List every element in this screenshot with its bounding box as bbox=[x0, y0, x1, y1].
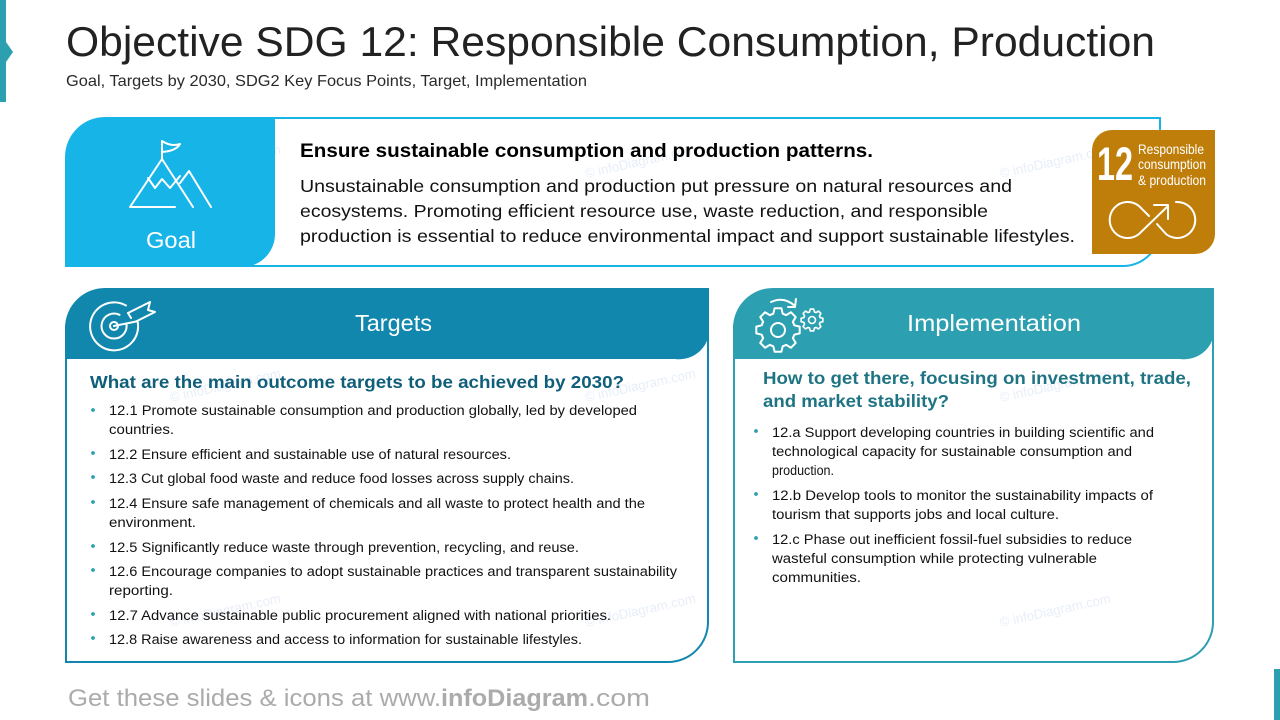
footer promo text: .com bbox=[588, 685, 650, 712]
watermarks: © infoDiagram.com bbox=[998, 142, 1112, 181]
goal label block bbox=[65, 117, 275, 267]
targets list: environment. bbox=[109, 515, 196, 530]
implementation list: 12.b Develop tools to monitor the sustainability impacts of bbox=[772, 488, 1153, 503]
implementation list: production. bbox=[772, 463, 834, 478]
icon: SDG 12 badge: consumption bbox=[1138, 156, 1206, 172]
watermarks: © infoDiagram.com bbox=[583, 366, 697, 405]
implementation heading: Implementation bbox=[907, 310, 1081, 336]
icon: SDG 12 badge: Responsible bbox=[1138, 141, 1204, 157]
footer promo text: infoDiagram bbox=[441, 685, 588, 712]
targets list: 12.2 Ensure efficient and sustainable use of natural resources. bbox=[109, 447, 511, 462]
title: Objective SDG 12: Responsible Consumption, Production bbox=[66, 18, 1155, 65]
targets list bbox=[91, 403, 677, 647]
implementation question: and market stability? bbox=[763, 391, 949, 411]
targets list: 12.7 Advance sustainable public procurement aligned with national priorities. bbox=[109, 608, 611, 623]
targets list: reporting. bbox=[109, 583, 173, 598]
watermarks: © infoDiagram.com bbox=[583, 591, 697, 630]
watermarks: © infoDiagram.com bbox=[998, 366, 1112, 405]
implementation header band bbox=[733, 288, 1214, 359]
corner accent bar bbox=[1274, 669, 1280, 720]
goal panel outline bbox=[105, 118, 1160, 266]
goal description bbox=[300, 176, 1075, 246]
implementation question: How to get there, focusing on investment, trade, bbox=[763, 368, 1191, 388]
implementation list: 12.c Phase out inefficient fossil-fuel subsidies to reduce bbox=[772, 532, 1132, 547]
implementation question bbox=[763, 368, 1191, 411]
watermarks: © infoDiagram.com bbox=[168, 366, 282, 405]
left accent tab bbox=[0, 0, 13, 102]
implementation list: 12.a Support developing countries in building scientific and bbox=[772, 425, 1154, 440]
footer promo text bbox=[68, 685, 650, 712]
targets header band bbox=[65, 288, 709, 359]
targets list: 12.3 Cut global food waste and reduce food losses across supply chains. bbox=[109, 471, 574, 486]
targets list: 12.6 Encourage companies to adopt sustainable practices and transparent sustainability bbox=[109, 564, 677, 579]
targets list: 12.4 Ensure safe management of chemicals and all waste to protect health and the bbox=[109, 496, 645, 511]
icon: mountain with flag bbox=[130, 141, 211, 207]
targets list: 12.5 Significantly reduce waste through prevention, recycling, and reuse. bbox=[109, 540, 579, 555]
icon: SDG 12 badge bbox=[1092, 130, 1215, 254]
watermarks: © infoDiagram.com bbox=[168, 591, 282, 630]
watermarks: © infoDiagram.com bbox=[583, 142, 697, 181]
panel: targets bbox=[65, 288, 709, 662]
targets list: countries. bbox=[109, 422, 174, 437]
goal description: production is essential to reduce environmental impact and support sustainable lifestyles. bbox=[300, 226, 1075, 246]
implementation panel outline bbox=[734, 325, 1213, 662]
implementation list: tourism that supports jobs and local culture. bbox=[772, 507, 1059, 522]
targets heading: Targets bbox=[355, 310, 432, 336]
implementation list: wasteful consumption while protecting vulnerable bbox=[771, 551, 1097, 566]
goal description: Unsustainable consumption and production put pressure on natural resources and bbox=[300, 176, 1012, 196]
targets list: 12.8 Raise awareness and access to information for sustainable lifestyles. bbox=[109, 632, 582, 647]
implementation list: technological capacity for sustainable consumption and bbox=[772, 444, 1132, 459]
implementation list: communities. bbox=[772, 570, 861, 585]
implementation list bbox=[754, 425, 1154, 585]
subtitle: Goal, Targets by 2030, SDG2 Key Focus Points, Target, Implementation bbox=[66, 73, 587, 90]
icon: gears with rotation arrow bbox=[756, 299, 823, 352]
targets list: 12.1 Promote sustainable consumption and production globally, led by developed bbox=[109, 403, 637, 418]
goal heading: Ensure sustainable consumption and production patterns. bbox=[300, 140, 873, 162]
targets panel outline bbox=[66, 325, 708, 662]
icon: SDG 12 badge: & production bbox=[1138, 172, 1206, 188]
panel: implementation bbox=[733, 288, 1214, 662]
targets question: What are the main outcome targets to be achieved by 2030? bbox=[90, 372, 624, 392]
panel: goal bbox=[65, 117, 1160, 267]
icon: SDG 12 badge: 12 bbox=[1097, 137, 1133, 190]
goal label: Goal bbox=[146, 227, 196, 253]
icon: target with arrow bbox=[90, 302, 155, 350]
watermarks bbox=[168, 142, 1112, 630]
watermarks: © infoDiagram.com bbox=[168, 142, 282, 181]
goal description: ecosystems. Promoting efficient resource use, waste reduction, and responsible bbox=[300, 201, 988, 221]
watermarks: © infoDiagram.com bbox=[998, 591, 1112, 630]
footer promo text: Get these slides & icons at www. bbox=[68, 685, 441, 712]
